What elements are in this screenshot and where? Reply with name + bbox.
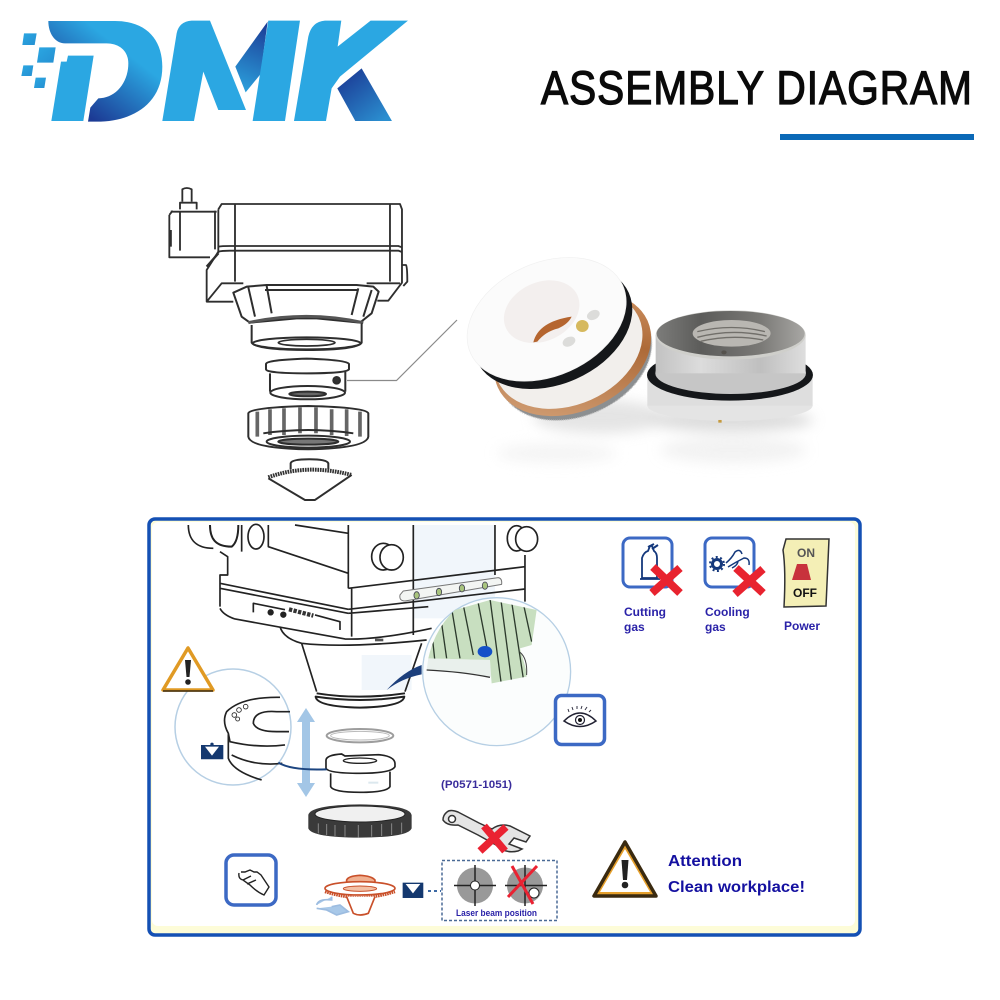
icon: eye inspection: [556, 696, 604, 744]
attention text: [668, 853, 805, 896]
label: cutting gas: gas: [624, 620, 645, 634]
exploded line drawing: [169, 188, 407, 500]
label: cutting gas: Cutting: [624, 605, 666, 619]
parts stack: [278, 729, 412, 838]
metal insert part: [647, 310, 813, 423]
icon: power switch: OFF: [793, 586, 817, 600]
knurled nut: [248, 406, 368, 449]
double arrow: [297, 708, 315, 797]
attention triangle: [594, 842, 656, 896]
label: cooling gas: [705, 605, 750, 634]
head drawing: [188, 524, 538, 708]
logo letter D: [48, 21, 162, 122]
head housing: [207, 204, 407, 302]
dotted connector: [428, 890, 441, 892]
panel frame: [149, 519, 860, 935]
label: cutting gas: [624, 605, 666, 634]
leader line: [347, 320, 457, 380]
icon: wrench crossed: [443, 810, 530, 852]
attention text: Attention: [668, 853, 742, 870]
label: cooling gas: Cooling: [705, 605, 750, 619]
beam label: Laser beam position: [456, 908, 537, 919]
insert ring: [326, 754, 395, 792]
ceramic body part: [447, 234, 671, 444]
left detail circle: [175, 669, 291, 785]
product photo: [447, 234, 813, 463]
icon: marker bottom: [403, 883, 423, 898]
logo letter K: [294, 21, 408, 121]
instruction panel: [149, 519, 860, 935]
icon: cutting gas: [623, 538, 680, 593]
label: cooling gas: gas: [705, 620, 726, 634]
blue link: [278, 763, 327, 770]
nozzle: [268, 459, 352, 500]
warning triangle small: [163, 648, 213, 691]
magnifier detail circle: [387, 598, 571, 746]
label: power: Power: [784, 619, 820, 633]
photo reflections: [497, 400, 813, 463]
icon: hand box: [226, 855, 276, 905]
part number: (P0571-1051): [441, 779, 512, 791]
logo letter M: [162, 21, 300, 121]
spacer ring part: [266, 359, 349, 399]
correct beam target: [454, 865, 496, 906]
icon: power switch: [783, 539, 829, 607]
title underline: [780, 134, 974, 140]
red nozzle: [317, 875, 395, 915]
DMK logo: [21, 21, 408, 122]
o-ring: [327, 729, 393, 742]
connector block: [169, 188, 217, 257]
icon: power switch: ON: [797, 546, 815, 560]
icon: marker left: [201, 743, 223, 759]
knurled ring: [308, 804, 412, 838]
laser beam position box: [442, 860, 557, 920]
wrong beam target: [505, 865, 547, 906]
logo pixel squares: [21, 33, 56, 88]
attention text: Clean workplace!: [668, 879, 805, 896]
icon: cooling gas: [705, 538, 763, 594]
bracket collar: [233, 285, 379, 350]
